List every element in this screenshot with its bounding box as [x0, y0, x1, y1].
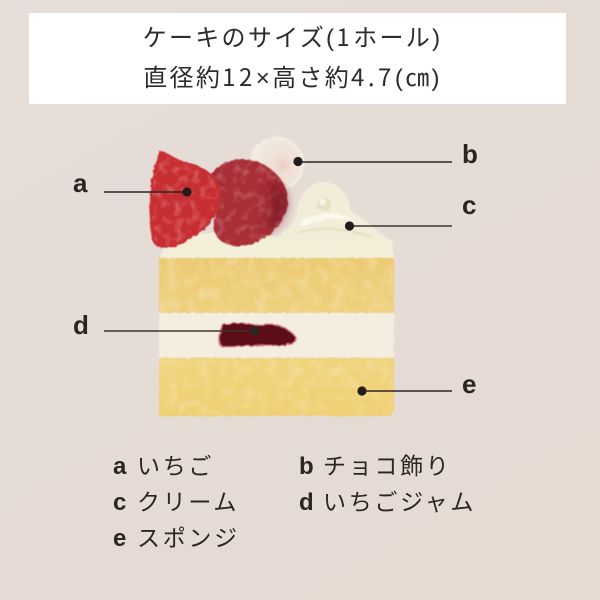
leader line a: [104, 187, 192, 197]
legend item d: いちごジャム: [323, 483, 476, 517]
legend item a: いちご: [137, 447, 214, 481]
strawberry right: [210, 159, 288, 246]
title box: [29, 13, 566, 104]
title line 1: ケーキのサイズ(1ホール): [143, 18, 442, 53]
legend item e: e: [113, 525, 126, 552]
cream topping: [160, 230, 394, 260]
label b: b: [462, 139, 478, 169]
label a: a: [73, 168, 87, 198]
label e: e: [462, 369, 476, 399]
legend item d: d: [299, 489, 314, 516]
label d: d: [73, 310, 89, 340]
leader line c: [345, 221, 452, 231]
chocolate decoration c: [273, 182, 391, 243]
legend item b: チョコ飾り: [323, 447, 452, 481]
sponge layer top: [159, 258, 394, 313]
title line 2: 直径約12×高さ約4.7(㎝): [143, 58, 442, 93]
chocolate decoration b: [250, 137, 304, 191]
legend item c: c: [113, 489, 126, 516]
leader line e: [357, 386, 452, 396]
legend item a: a: [113, 453, 126, 480]
cream layer: [159, 313, 394, 358]
legend: [113, 447, 476, 553]
strawberry jam: [218, 323, 297, 347]
strawberry left: [150, 151, 220, 248]
legend item c: クリーム: [137, 483, 239, 517]
leader line b: [293, 157, 452, 166]
leader line d: [104, 326, 260, 336]
legend item b: b: [299, 453, 314, 480]
sponge layer bottom: [159, 358, 394, 416]
label c: c: [462, 190, 476, 220]
legend item e: スポンジ: [137, 519, 240, 553]
